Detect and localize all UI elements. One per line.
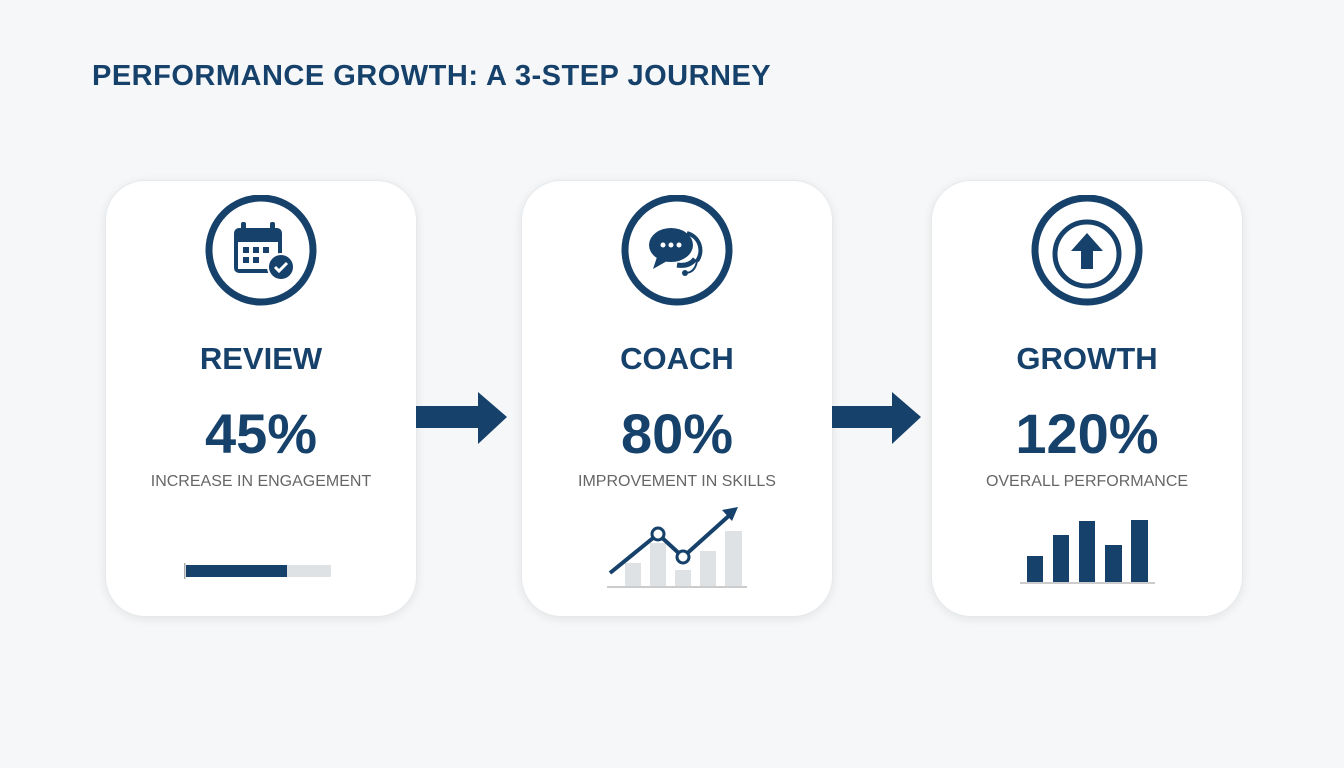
heading: GROWTH — [1016, 341, 1158, 376]
arrow 2 — [832, 392, 921, 444]
subtitle: INCREASE IN ENGAGEMENT — [151, 473, 371, 490]
line chart — [607, 507, 747, 588]
heading: REVIEW — [200, 341, 322, 376]
arrow 1 — [416, 392, 507, 444]
subtitle: IMPROVEMENT IN SKILLS — [578, 473, 776, 490]
icon: upward arrow — [1032, 195, 1142, 306]
subtitle: OVERALL PERFORMANCE — [986, 473, 1188, 490]
bar chart — [1020, 520, 1155, 584]
number: 80% — [621, 402, 733, 465]
panel: review — [105, 180, 417, 617]
panel: coach — [521, 180, 833, 617]
panel: growth — [931, 180, 1243, 617]
progress bar — [184, 563, 331, 579]
heading: COACH — [620, 341, 734, 376]
icon: chat headset — [622, 195, 732, 306]
number: 120% — [1015, 402, 1159, 465]
icon: calendar — [206, 195, 316, 306]
number: 45% — [205, 402, 317, 465]
title: PERFORMANCE GROWTH: A 3-STEP JOURNEY — [92, 60, 771, 92]
